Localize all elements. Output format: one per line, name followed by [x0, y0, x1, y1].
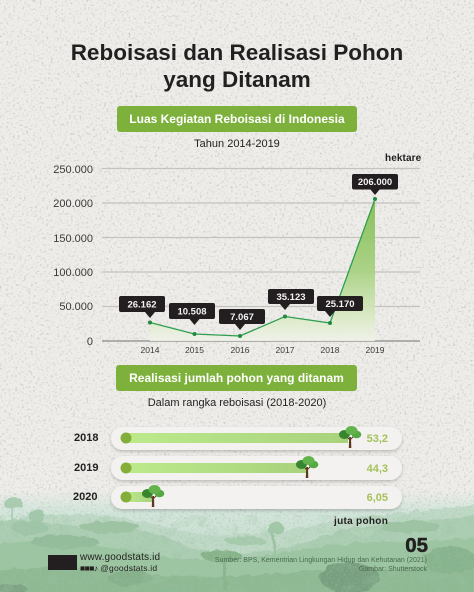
- heading: realisasi jumlah pohon: [116, 365, 357, 391]
- title: Reboisasi dan Realisasi Pohon: [71, 40, 403, 65]
- row: 2020: 6,05: [367, 492, 388, 504]
- y axis labels: [53, 164, 93, 348]
- title: yang Ditanam: [163, 67, 311, 92]
- website and social handle: ■■■♪ @goodstats.id: [80, 563, 157, 573]
- y axis labels: 250.000: [53, 164, 93, 176]
- heading: luas kegiatan reboisasi: Luas Kegiatan Reboisasi di Indonesia: [129, 112, 345, 126]
- area fill: [150, 199, 375, 341]
- x axis labels: 2014: [141, 345, 160, 355]
- y axis labels: 200.000: [53, 198, 93, 210]
- x axis labels: 2015: [185, 345, 204, 355]
- x axis labels: 2019: [366, 345, 385, 355]
- x axis labels: 2017: [276, 345, 295, 355]
- line chart: luas reboisasi: 206.000: [358, 177, 392, 188]
- forest background: [0, 490, 474, 592]
- heading: luas kegiatan reboisasi: [117, 106, 357, 132]
- page number: 05: [405, 534, 428, 557]
- callouts: [119, 174, 398, 330]
- row: 2018: 53,2: [367, 433, 388, 445]
- y axis labels: 50.000: [59, 301, 93, 313]
- logo block: [48, 555, 77, 570]
- x axis labels: 2018: [321, 345, 340, 355]
- y axis labels: 0: [87, 336, 93, 348]
- source note: [215, 556, 427, 573]
- title: [71, 40, 403, 92]
- line chart: luas reboisasi: 25.170: [325, 299, 355, 310]
- row: 2018: 2018: [74, 432, 98, 444]
- y axis labels: 150.000: [53, 233, 93, 245]
- data points: [148, 197, 377, 338]
- source note: Sumber: BPS, Kementrian Lingkungan Hidup dan Kehutanan (2021): [215, 557, 427, 564]
- website and social handle: [80, 552, 160, 573]
- row: 2018: [74, 426, 402, 450]
- source note: Gambar: Shutterstock: [359, 566, 427, 573]
- unit label: juta pohon: juta pohon: [334, 516, 388, 527]
- line chart: luas reboisasi: 26.162: [127, 300, 157, 310]
- row: 2019: 44,3: [367, 463, 388, 475]
- row: 2020: 2020: [73, 491, 97, 503]
- y axis labels: 100.000: [53, 267, 93, 279]
- data line: [150, 199, 375, 336]
- website and social handle: www.goodstats.id: [80, 552, 160, 563]
- row: 2019: 2019: [74, 462, 98, 474]
- x axis labels: [141, 345, 385, 355]
- decorative tree shapes: [3, 497, 23, 509]
- line chart: luas reboisasi: 10.508: [177, 306, 207, 318]
- row: 2020: [73, 485, 402, 509]
- line chart: luas reboisasi: 35.123: [276, 292, 306, 303]
- subtitle: dalam rangka reboisasi: Dalam rangka reboisasi (2018-2020): [148, 397, 326, 409]
- heading: realisasi jumlah pohon: Realisasi jumlah pohon yang ditanam: [129, 371, 344, 385]
- row: 2019: [74, 456, 402, 480]
- subtitle: tahun: Tahun 2014-2019: [194, 138, 280, 150]
- line chart: luas reboisasi: 7.067: [230, 312, 254, 323]
- x axis labels: 2016: [231, 345, 250, 355]
- unit label: hektare: hektare: [385, 153, 421, 164]
